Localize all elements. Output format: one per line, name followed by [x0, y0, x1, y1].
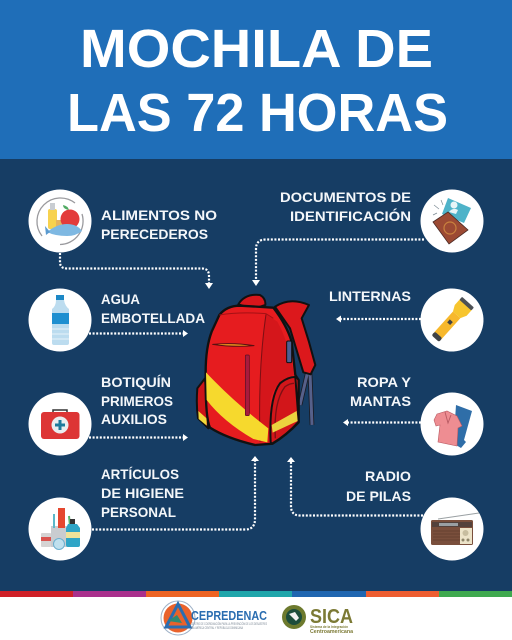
label: alimentos no perecederos: ALIMENTOS NO [101, 207, 217, 223]
label: botiquin primeros auxilios: BOTIQUÍN [101, 374, 171, 390]
panel: header band [0, 0, 512, 159]
title: MOCHILA DE [80, 19, 433, 79]
label: radio de pilas: DE PILAS [346, 488, 411, 504]
label: botiquin primeros auxilios: PRIMEROS [101, 393, 173, 409]
icon: radio [420, 498, 484, 560]
illustration: red backpack [197, 295, 315, 445]
arrow: botiquin to backpack [89, 434, 188, 441]
label: documentos de identificacion: IDENTIFICACIÓN [290, 207, 411, 224]
icon: hygiene items [28, 498, 92, 560]
label: documentos de identificacion: DOCUMENTOS DE [280, 189, 411, 205]
label: agua embotellada [101, 291, 205, 326]
arrow: linternas to backpack [336, 316, 421, 322]
logo: sica [282, 605, 353, 635]
title: LAS 72 HORAS [67, 83, 448, 143]
arrow: documentos to backpack [252, 240, 424, 286]
label: linternas: LINTERNAS [329, 288, 411, 304]
logo: sica: Sistema de la Integración [310, 624, 348, 629]
label: alimentos no perecederos [101, 207, 217, 242]
label: articulos de higiene personal [101, 466, 184, 520]
label: articulos de higiene personal: ARTÍCULOS [101, 466, 179, 482]
label: radio de pilas: RADIO [365, 468, 411, 484]
label: articulos de higiene personal: DE HIGIENE [101, 485, 184, 501]
label: alimentos no perecederos: PERECEDEROS [101, 226, 208, 242]
label: botiquin primeros auxilios [101, 374, 173, 427]
panel: main navy background [0, 159, 512, 591]
logo: cepredenac: CENTRO DE COORDINACIÓN PARA LA PREVENCIÓN DE LOS DESASTRES [191, 621, 267, 626]
logo: cepredenac: CEPREDENAC [191, 608, 268, 623]
title [67, 19, 448, 143]
icon: clothes [420, 392, 484, 456]
label: botiquin primeros auxilios: AUXILIOS [101, 411, 167, 427]
arrow: radio to backpack [287, 457, 423, 516]
icon: documents [420, 190, 484, 252]
arrow: alimentos to backpack [60, 253, 213, 289]
label: ropa y mantas: ROPA Y [357, 374, 412, 390]
arrow: ropa to backpack [343, 419, 421, 426]
logo: cepredenac [161, 601, 268, 635]
icon: flashlight [408, 276, 496, 364]
label: ropa y mantas [350, 374, 412, 409]
icon: first aid kit [28, 392, 92, 456]
label: articulos de higiene personal: PERSONAL [101, 504, 176, 520]
colour strip [0, 591, 512, 597]
label: radio de pilas [346, 468, 411, 504]
icon: food [28, 190, 92, 252]
logo: cepredenac: EN AMÉRICA CENTRAL Y REPÚBLICA DOMINICANA [191, 625, 243, 630]
arrow: higiene to backpack [92, 456, 259, 530]
icon: water bottle [28, 288, 92, 352]
label: ropa y mantas: MANTAS [350, 393, 411, 409]
label: agua embotellada: EMBOTELLADA [101, 310, 205, 326]
arrow: agua to backpack [89, 330, 188, 337]
logo: sica: SICA [310, 606, 353, 628]
label: documentos de identificacion [280, 189, 411, 224]
label: agua embotellada: AGUA [101, 291, 140, 307]
logo: sica: Centroamericana [310, 629, 353, 635]
